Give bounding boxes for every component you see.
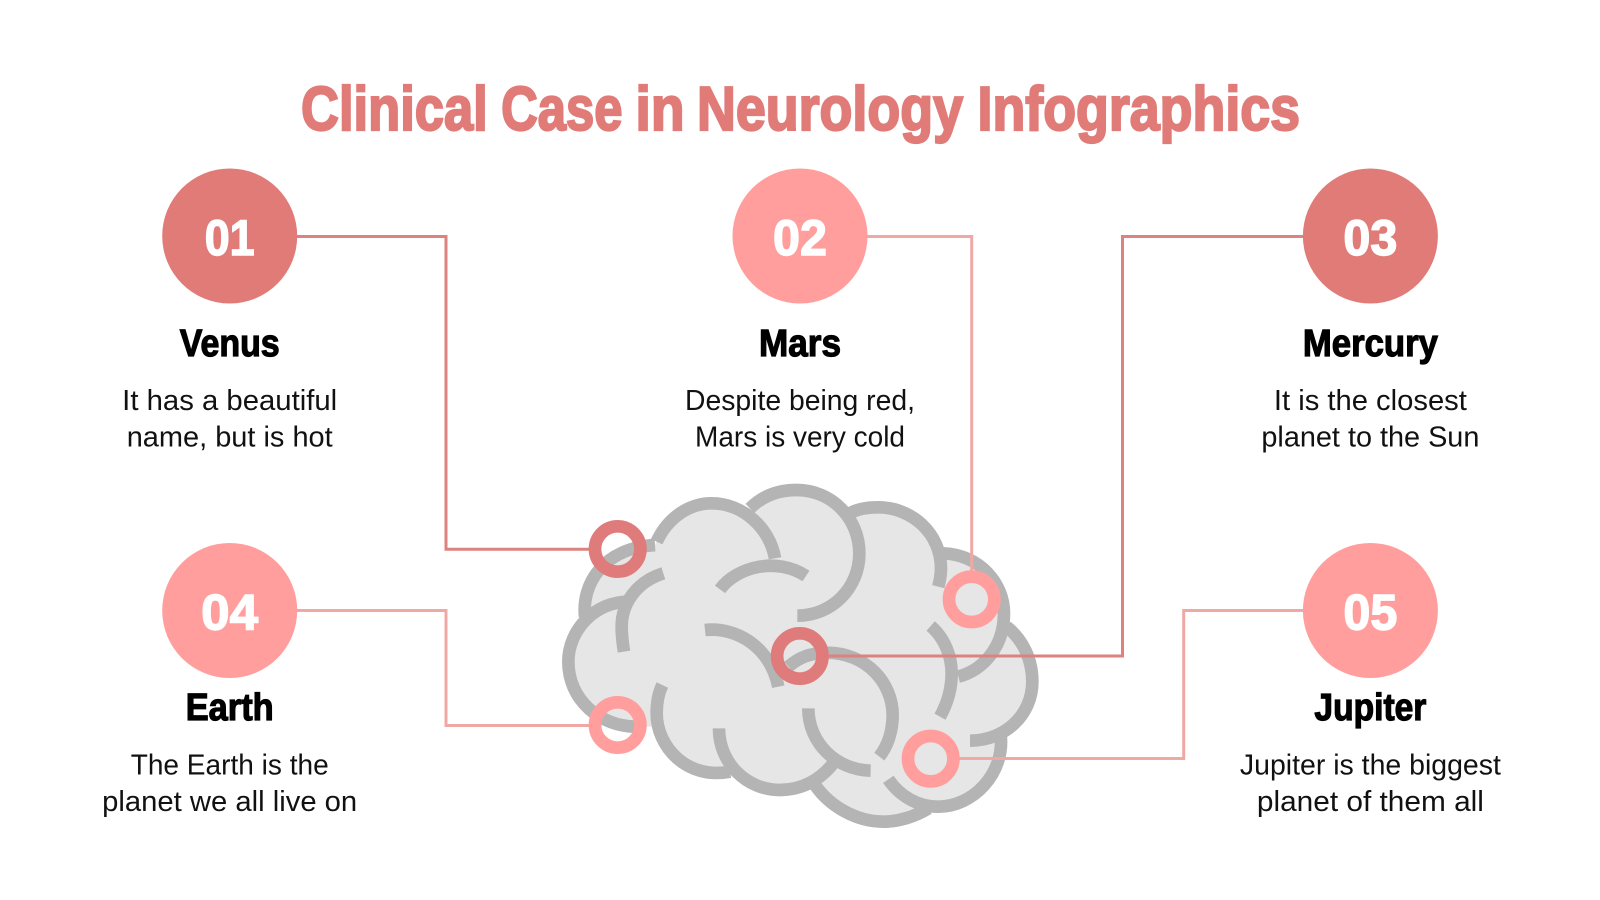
connector: 02 to brain (865, 236, 972, 575)
connector: 03 to brain (824, 236, 1304, 656)
description: Mars: Mars is very cold (695, 422, 905, 454)
title: Neurology (697, 75, 963, 144)
ring marker 05 (908, 736, 953, 781)
heading: Earth: Earth (186, 687, 274, 729)
number badge 04: 04 (201, 584, 258, 640)
number badge 01: 01 (205, 210, 255, 266)
description: Venus (122, 385, 337, 454)
number badge 05 (1303, 543, 1438, 678)
description: Mercury: planet to the Sun (1261, 422, 1479, 454)
connector: 01 to brain (295, 236, 592, 549)
connector: 04 to brain (295, 610, 592, 726)
ring marker 04 (595, 702, 640, 748)
description: Earth: The Earth is the (131, 750, 329, 782)
number badge 04 (162, 543, 297, 678)
number badge 03: 03 (1343, 210, 1397, 266)
description: Mercury (1261, 385, 1479, 454)
title: Clinical (301, 75, 488, 144)
ring marker 02 (949, 577, 994, 622)
item 04: Earth (102, 543, 357, 818)
number badge 02 (732, 168, 868, 304)
description: Venus: name, but is hot (127, 422, 333, 454)
heading: Jupiter: Jupiter (1314, 687, 1427, 729)
title: in (636, 75, 684, 144)
description: Jupiter: Jupiter is the biggest (1240, 750, 1501, 782)
title: Case (501, 75, 622, 144)
description: Mercury: It is the closest (1274, 385, 1467, 417)
number badge 02: 02 (773, 210, 827, 266)
item 01: Venus (122, 168, 337, 454)
description: Jupiter: planet of them all (1257, 786, 1484, 818)
heading: Venus: Venus (180, 323, 280, 365)
title: Infographics (978, 75, 1300, 144)
number badge 01 (162, 168, 297, 304)
description: Jupiter (1240, 750, 1501, 818)
ring marker 01 (595, 526, 640, 572)
description: Venus: It has a beautiful (122, 385, 337, 417)
connector: 05 to brain (955, 610, 1304, 758)
brain illustration (568, 490, 1032, 822)
heading: Mars: Mars (759, 323, 841, 365)
description: Earth (102, 750, 357, 818)
number badge 05: 05 (1343, 584, 1397, 640)
title (301, 75, 1300, 144)
ring marker 03 (777, 633, 822, 679)
description: Mars (685, 385, 915, 454)
item 03: Mercury (1261, 168, 1479, 454)
description: Mars: Despite being red, (685, 385, 915, 417)
description: Earth: planet we all live on (102, 786, 357, 818)
heading: Mercury: Mercury (1303, 323, 1438, 365)
item 02: Mars (685, 168, 915, 454)
number badge 03 (1303, 168, 1438, 304)
item 05: Jupiter (1240, 543, 1501, 818)
